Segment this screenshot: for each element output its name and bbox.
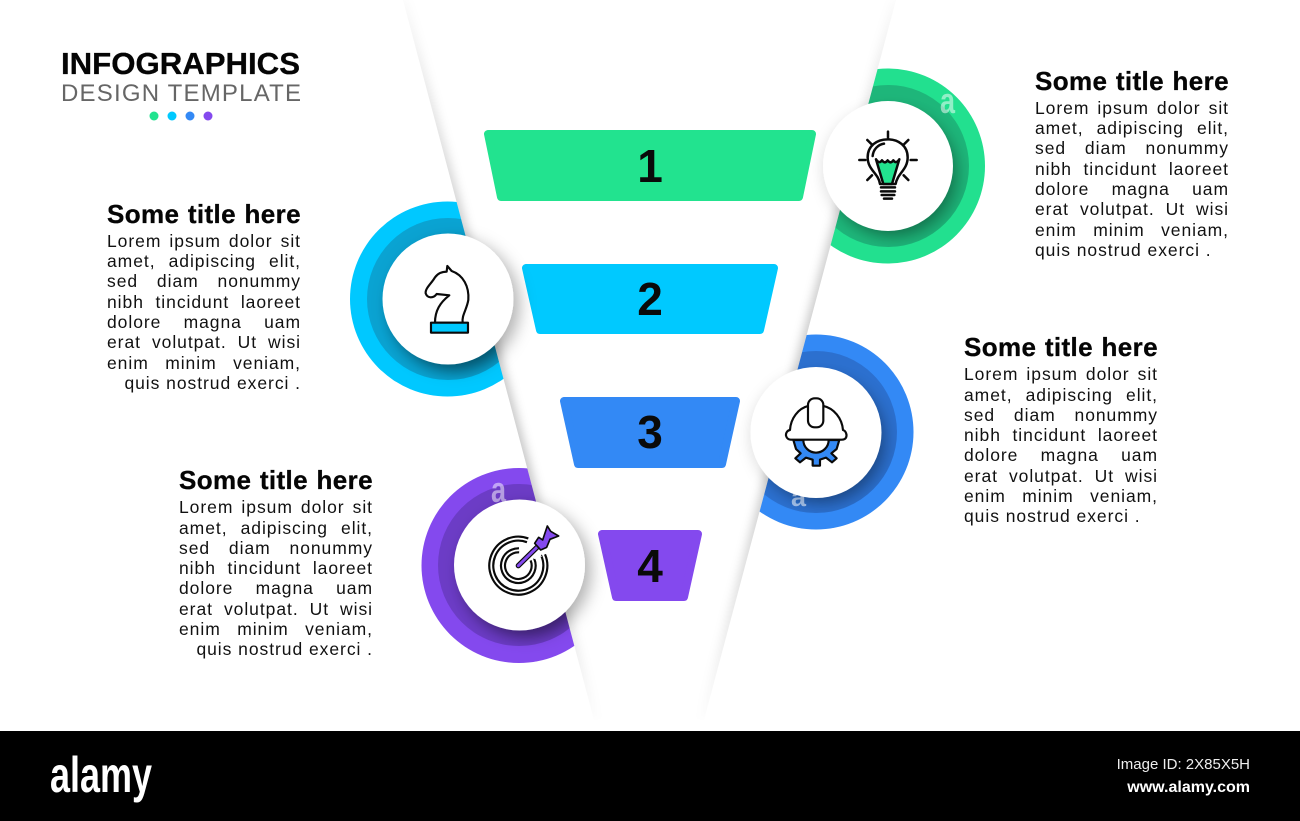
text block: step 3: quis nostrud exerci . (964, 506, 1141, 526)
footer logo: alamy (50, 747, 152, 803)
text block: step 2: nibh tincidunt laoreet (107, 292, 301, 312)
text block: step 4: dolore magna uam (179, 578, 373, 598)
circle: purple step (454, 500, 585, 630)
ring: cyan step 2 (350, 202, 504, 396)
funnel bar 1 (488, 134, 812, 197)
ring: purple step 4 (422, 468, 574, 663)
funnel bar 3 (564, 401, 736, 464)
text block: step 3: erat volutpat. Ut wisi (964, 466, 1158, 486)
footer url: www.alamy.com (1126, 779, 1250, 796)
text block: step 4: nibh tincidunt laoreet (179, 558, 373, 578)
text block: step 2 (107, 198, 301, 393)
icon: helmet and gear (786, 398, 847, 466)
icon: chess knight (426, 266, 468, 333)
text block: step 2: sed diam nonummy (107, 271, 301, 291)
text block: step 3: sed diam nonummy (964, 405, 1158, 425)
text block: step 4: sed diam nonummy (179, 538, 373, 558)
text block: step 4: enim minim veniam, (179, 619, 373, 639)
text block: step 4: Lorem ipsum dolor sit (179, 497, 373, 517)
text block: step 2: quis nostrud exerci . (124, 373, 301, 393)
text block: step 2: enim minim veniam, (107, 353, 301, 373)
text block: step 1: amet, adipiscing elit, (1035, 118, 1229, 138)
funnel body (412, 31, 888, 680)
icon: target with arrow (480, 526, 559, 604)
circle: blue step (750, 367, 882, 498)
text block: step 4: quis nostrud exerci . (196, 639, 373, 659)
text block: step 3: amet, adipiscing elit, (964, 385, 1158, 405)
funnel bar 2 (526, 268, 774, 330)
text block: step 1: Some title here (1035, 66, 1229, 96)
legend dots (150, 112, 212, 120)
text block: step 4: erat volutpat. Ut wisi (179, 599, 373, 619)
icon: light bulb (859, 132, 917, 199)
ring: blue step 3 (760, 334, 914, 530)
text block: step 3: dolore magna uam (964, 445, 1158, 465)
funnel bar 4: 4 (637, 540, 663, 592)
text block: step 2: Some title here (107, 198, 301, 228)
text block: step 4: amet, adipiscing elit, (179, 518, 373, 538)
ring: green step 1: a (940, 80, 956, 121)
text block: step 1: Lorem ipsum dolor sit (1035, 98, 1229, 118)
text block: step 3: enim minim veniam, (964, 486, 1158, 506)
text block: step 1: erat volutpat. Ut wisi (1035, 199, 1229, 219)
funnel bar 2: 2 (637, 273, 663, 325)
text block: step 3 (964, 332, 1158, 526)
text block: step 4: Some title here (179, 465, 373, 495)
funnel bar 1: 1 (637, 140, 663, 192)
ring: blue step 3: a (791, 482, 807, 512)
title block: INFOGRAPHICS (61, 46, 300, 81)
text block: step 2: erat volutpat. Ut wisi (107, 332, 301, 352)
ring: green step 1 (830, 68, 985, 264)
text block: step 2: amet, adipiscing elit, (107, 251, 301, 271)
footer bar (0, 731, 1300, 821)
circle: green step (823, 101, 953, 231)
text block: step 2: dolore magna uam (107, 312, 301, 332)
ring: purple step 4: a (491, 469, 507, 510)
text block: step 1: enim minim veniam, (1035, 220, 1229, 240)
text block: step 1: nibh tincidunt laoreet (1035, 159, 1229, 179)
funnel bar 3: 3 (637, 406, 663, 458)
text block: step 1: sed diam nonummy (1035, 138, 1229, 158)
text block: step 2: Lorem ipsum dolor sit (107, 231, 301, 251)
circle: cyan step (382, 234, 514, 364)
text block: step 1: quis nostrud exerci . (1035, 240, 1212, 260)
text block: step 3: Lorem ipsum dolor sit (964, 364, 1158, 384)
title block (61, 46, 301, 120)
funnel bar 4 (602, 534, 698, 597)
text block: step 3: nibh tincidunt laoreet (964, 425, 1158, 445)
text block: step 1 (1035, 66, 1229, 260)
image id: Image ID: 2X85X5H (1117, 756, 1250, 773)
title block: DESIGN TEMPLATE (61, 80, 301, 107)
text block: step 3: Some title here (964, 332, 1158, 362)
text block: step 1: dolore magna uam (1035, 179, 1229, 199)
text block: step 4 (179, 465, 373, 659)
